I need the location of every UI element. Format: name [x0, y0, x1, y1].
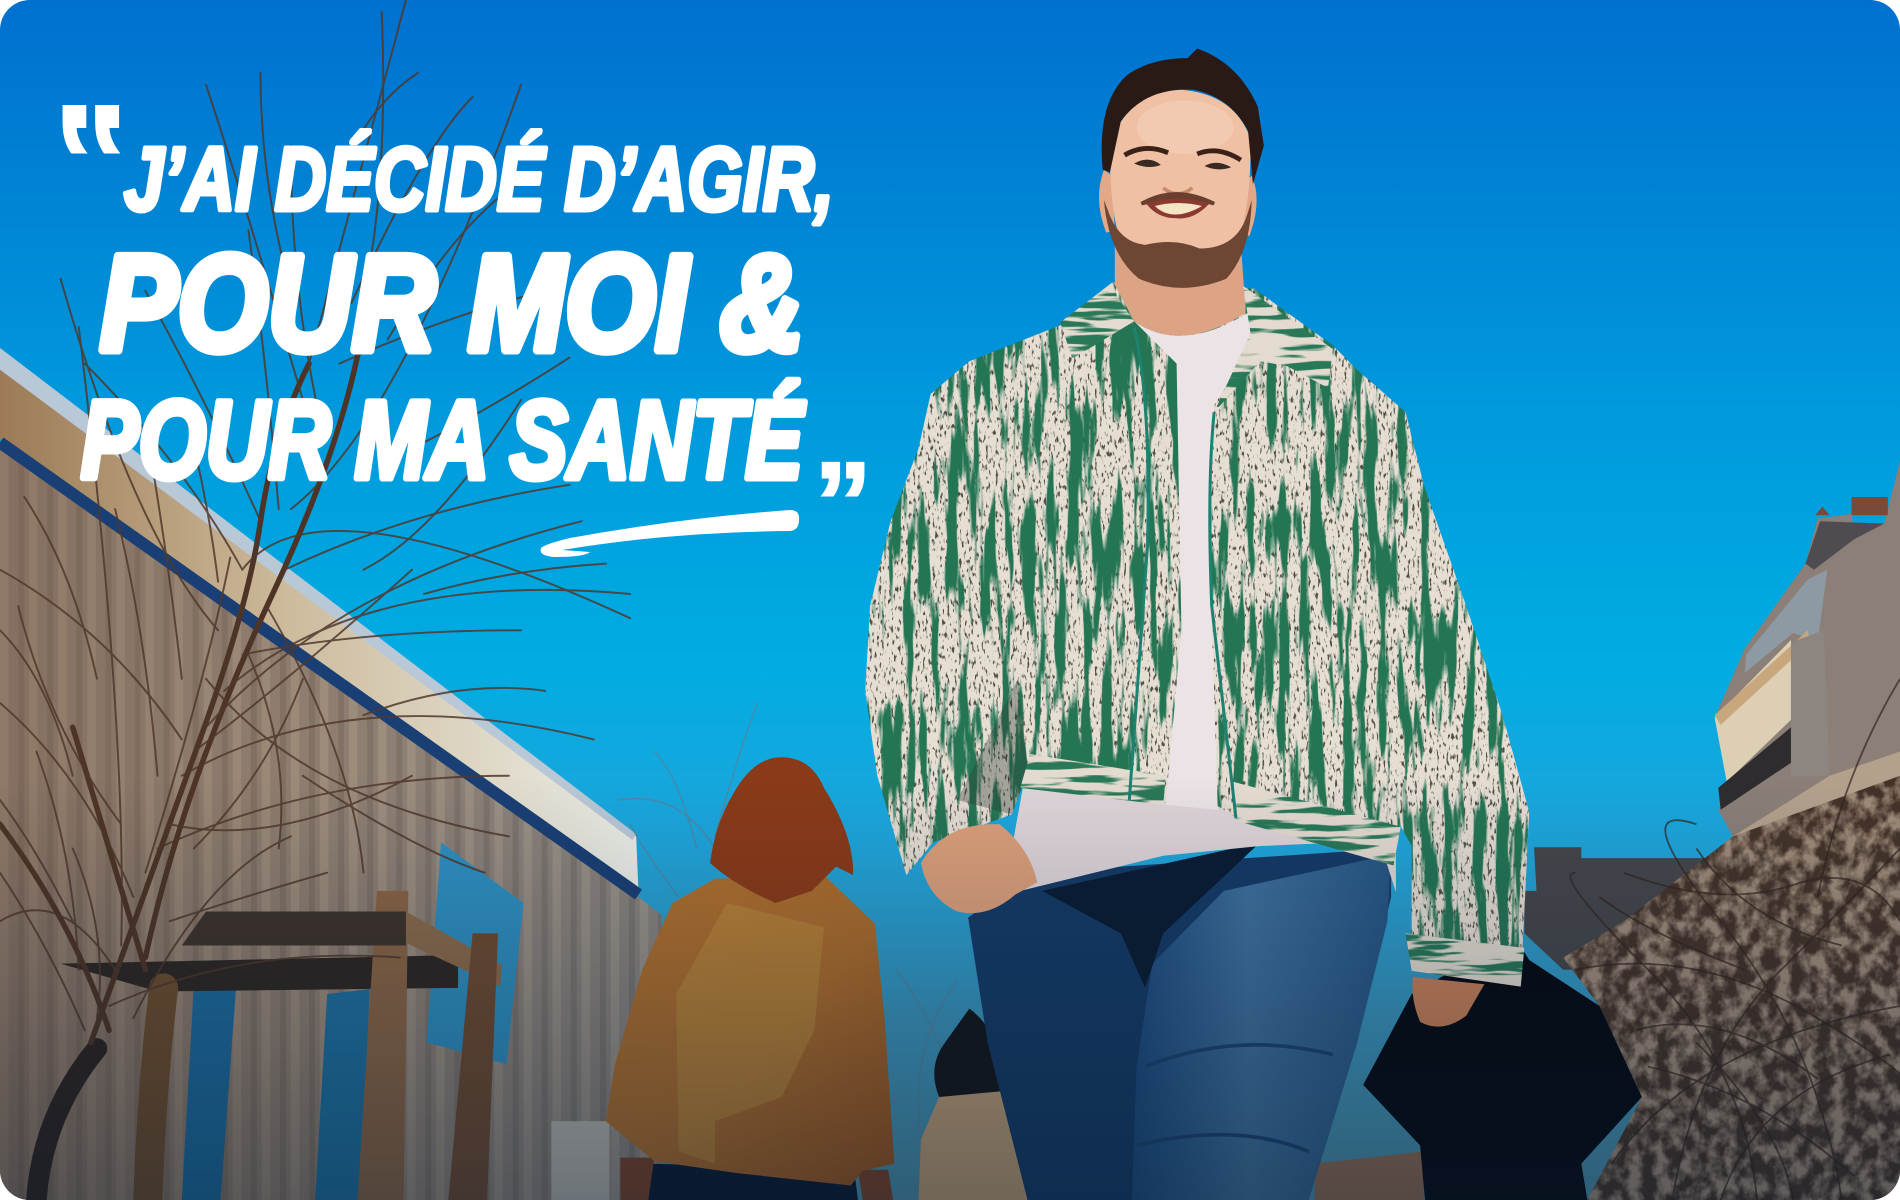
smile	[1146, 199, 1209, 218]
third person seated	[918, 1008, 1040, 1200]
thin twigs behind woman	[618, 703, 957, 1139]
cornice	[1715, 630, 1810, 725]
blue door	[315, 989, 370, 1200]
zippers	[1129, 327, 1236, 818]
lower beam	[61, 955, 458, 992]
side wall	[1791, 630, 1830, 776]
wooden pergola	[61, 891, 502, 1200]
woman walking away	[606, 757, 894, 1200]
white tee	[1134, 313, 1255, 810]
collar and hems	[1020, 282, 1524, 986]
corrugated wall	[0, 448, 662, 1200]
brows	[1124, 148, 1241, 160]
blue stripe	[0, 442, 639, 895]
right hand	[1412, 977, 1484, 1027]
balcony	[1718, 727, 1793, 810]
face	[1110, 90, 1251, 285]
dark rear block	[1524, 847, 1733, 970]
hands	[620, 1158, 893, 1200]
beige top	[918, 1091, 1040, 1200]
full jeans shape	[968, 848, 1391, 1200]
tan shirt	[606, 875, 894, 1185]
crease	[1137, 1045, 1333, 1152]
line two: POUR MOI &	[100, 227, 804, 379]
left building	[0, 348, 662, 1200]
tee hem	[1012, 782, 1396, 892]
haussmann facade	[1715, 461, 1900, 836]
right tree mass	[1563, 776, 1900, 1200]
utility box	[551, 1121, 610, 1200]
nose	[1163, 188, 1192, 194]
teeth	[1155, 203, 1202, 215]
jacket shadow	[957, 679, 1030, 815]
eyes	[1134, 160, 1231, 169]
lighter right leg	[1132, 855, 1391, 1200]
forehead light	[1137, 101, 1234, 154]
background building right	[1524, 461, 1900, 970]
cream storey	[1715, 640, 1796, 782]
mansard roof	[1745, 570, 1827, 673]
jacket	[848, 273, 1551, 1000]
line one: J’AI DÉCIDÉ D’AGIR,	[124, 129, 834, 230]
beard	[1104, 200, 1252, 288]
jeans	[968, 842, 1391, 1200]
closing quotation mark: ”	[814, 439, 872, 567]
line three: POUR MA SANTÉ	[81, 379, 806, 502]
brush underline	[541, 510, 799, 557]
blue panels	[182, 984, 236, 1200]
shadow at waist	[1042, 842, 1260, 988]
roof edge	[0, 348, 636, 840]
person in black	[1363, 927, 1642, 1200]
left tree	[0, 0, 957, 1200]
post front	[448, 933, 498, 1200]
pants	[648, 1164, 858, 1200]
branches	[0, 0, 630, 1030]
left hand	[921, 824, 1037, 913]
hair	[1102, 48, 1264, 184]
post rear	[357, 891, 408, 1200]
top beam	[182, 912, 406, 945]
chimneys	[1815, 497, 1888, 515]
main stems	[0, 267, 370, 1042]
ears	[1099, 170, 1257, 236]
main man	[848, 48, 1551, 1200]
opening quotation mark: “	[52, 4, 130, 188]
dark hair	[934, 1008, 1013, 1121]
trunks	[36, 1048, 97, 1200]
coat	[1363, 927, 1642, 1200]
neck	[1115, 242, 1246, 336]
shirt highlights	[676, 903, 824, 1164]
side beam	[406, 912, 502, 987]
right tree branches	[1570, 679, 1900, 1200]
slate top	[1805, 521, 1884, 570]
glazed panel	[427, 842, 523, 1064]
bottom shade	[0, 776, 1900, 1200]
far low wall	[1315, 1152, 1424, 1200]
red hair	[710, 757, 853, 903]
fascia	[0, 364, 639, 895]
moustache	[1141, 194, 1214, 204]
